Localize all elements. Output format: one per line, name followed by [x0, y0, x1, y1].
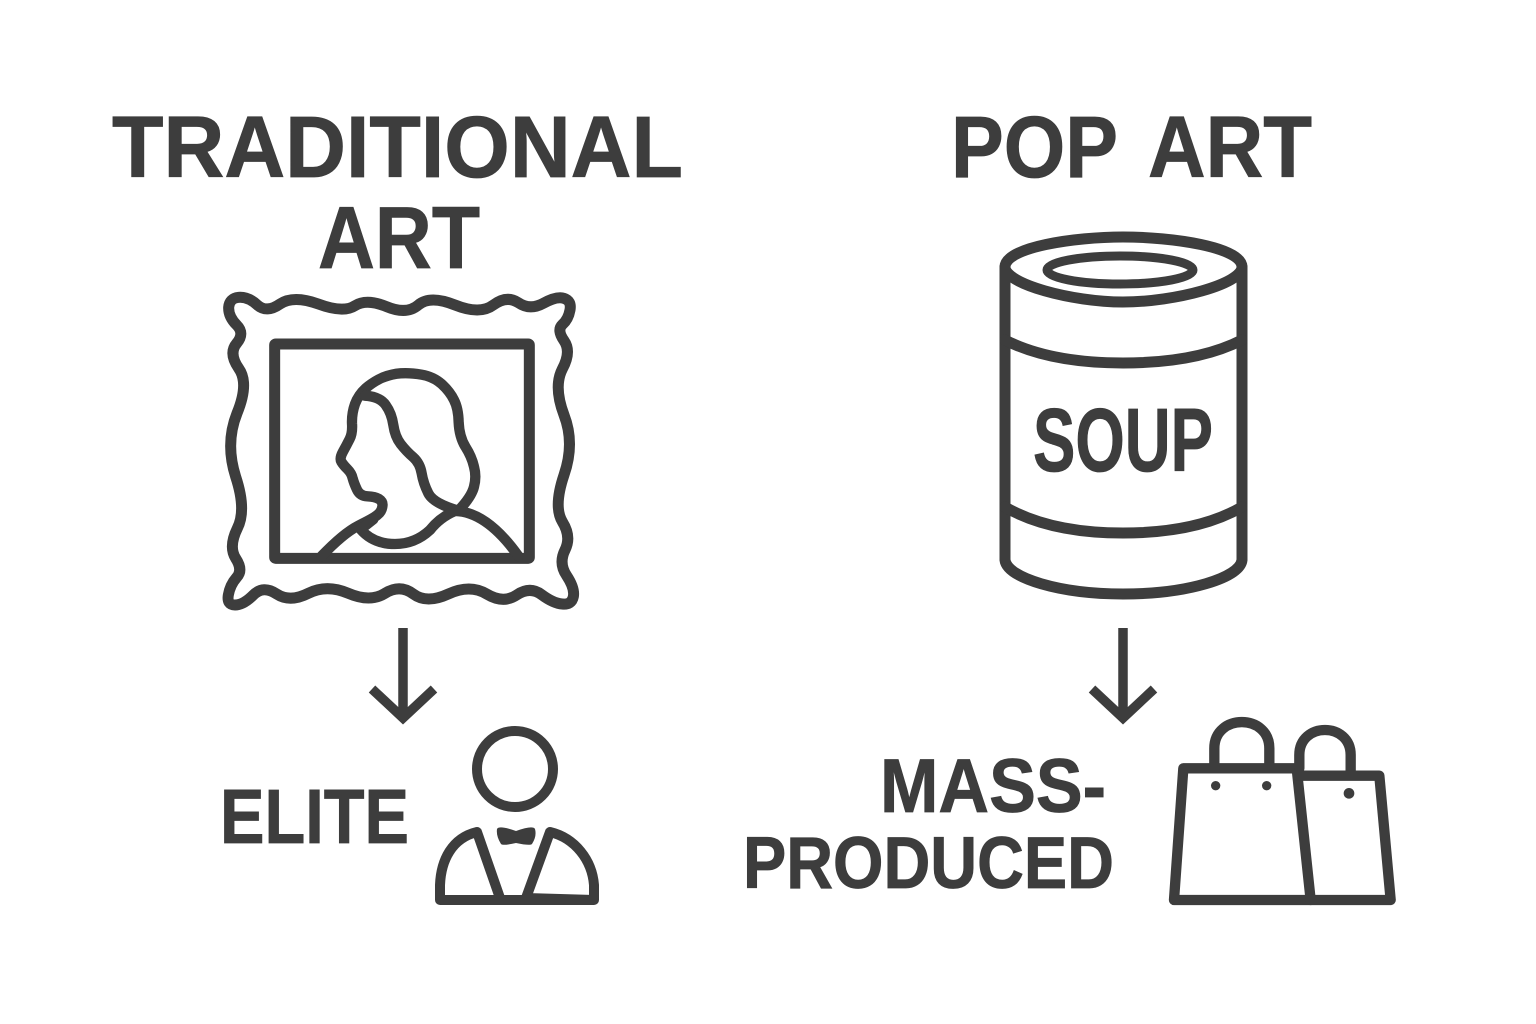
large bag	[1174, 722, 1311, 900]
label: mass-produced: PRODUCED	[743, 823, 1114, 904]
torso with lapels	[440, 832, 594, 900]
arrow: frame to elite	[372, 628, 434, 718]
arrow: can to mass-produced	[1092, 628, 1154, 718]
icon: elite person with bow tie	[440, 731, 594, 900]
bow tie	[497, 827, 536, 845]
head	[477, 731, 553, 807]
can top rim	[1005, 237, 1242, 302]
heading: pop art: ART	[1148, 99, 1312, 196]
heading: pop art: POP	[951, 99, 1118, 196]
label: mass-produced	[743, 744, 1114, 904]
can inner lid	[1047, 256, 1193, 284]
portrait: shoulder and collar	[361, 511, 518, 556]
label: elite: ELITE	[220, 774, 409, 860]
icon: soup can	[1005, 237, 1242, 594]
label bands	[1005, 340, 1242, 533]
heading: pop art	[951, 99, 1312, 196]
portrait: face and hair outline	[322, 373, 475, 556]
label: mass-produced: MASS-	[880, 744, 1106, 829]
heading: traditional art	[112, 99, 683, 287]
portrait: inner hair line	[365, 396, 458, 511]
icon: shopping bags	[1174, 722, 1391, 900]
ornate outer frame	[228, 297, 574, 605]
can body	[1005, 267, 1242, 594]
heading: traditional art: TRADITIONAL	[112, 99, 683, 196]
inner picture rectangle	[275, 344, 529, 558]
can label: soup: SOUP	[1033, 391, 1213, 491]
small bag	[1298, 730, 1391, 900]
heading: traditional art: ART	[318, 188, 480, 287]
icon: ornate picture frame with portrait	[228, 297, 574, 605]
bag holes	[1211, 781, 1354, 799]
